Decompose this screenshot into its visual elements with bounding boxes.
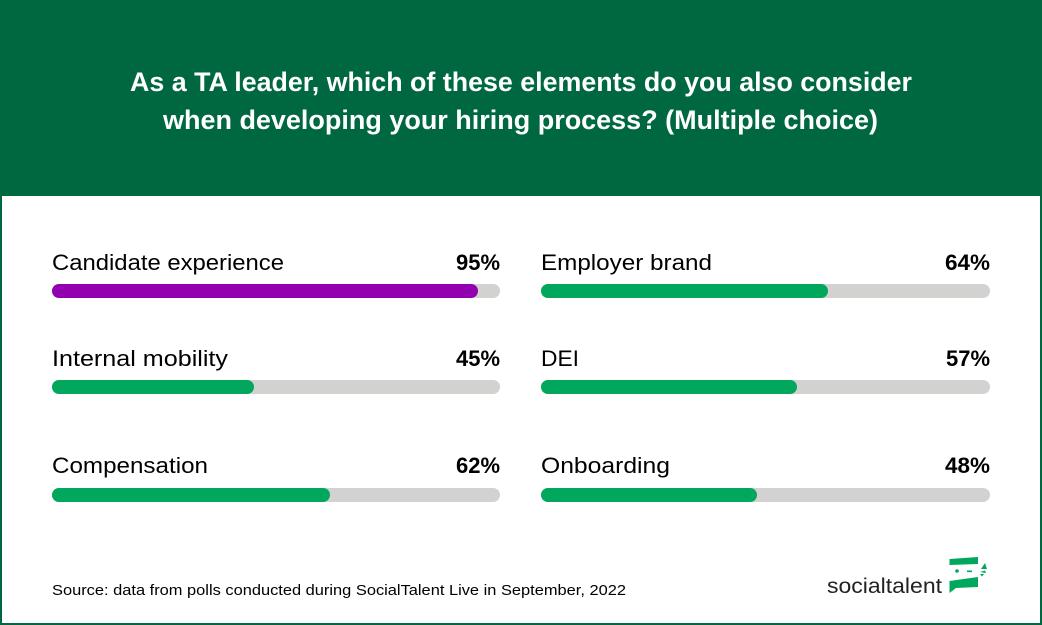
- bar: candidate experience 95%: [52, 250, 500, 298]
- logo: socialtalent: socialtalent: [827, 574, 942, 598]
- bar: DEI 57%: DEI: [541, 346, 579, 371]
- bar: candidate experience 95%: 95%: [456, 250, 500, 275]
- bar: compensation 62%: [52, 453, 500, 502]
- bar: internal mobility 45%: Internal mobility: [52, 346, 228, 371]
- bar: onboarding 48%: [541, 453, 990, 502]
- bar: DEI 57%: [541, 346, 990, 394]
- title: [130, 67, 912, 135]
- source note: Source: data from polls conducted during SocialTalent Live in September, 2022: [52, 582, 626, 599]
- logo: socialtalent: [827, 557, 987, 598]
- bar: employer brand 64%: Employer brand: [541, 250, 712, 275]
- title: As a TA leader, which of these elements do you also consider: [130, 67, 912, 97]
- bar: internal mobility 45%: 45%: [456, 346, 500, 371]
- bar: compensation 62%: Compensation: [52, 453, 208, 478]
- title: when developing your hiring process? (Multiple choice): [162, 105, 878, 135]
- bar: compensation 62%: 62%: [456, 453, 500, 478]
- bar: DEI 57%: 57%: [946, 346, 990, 371]
- bar: internal mobility 45%: [52, 346, 500, 394]
- icon: speech bubble: [950, 557, 987, 593]
- bar: onboarding 48%: Onboarding: [541, 453, 670, 478]
- bar: employer brand 64%: 64%: [945, 250, 990, 275]
- header banner: [0, 0, 1042, 196]
- bar: employer brand 64%: [541, 250, 990, 298]
- bar: onboarding 48%: 48%: [945, 453, 990, 478]
- bar: candidate experience 95%: Candidate experience: [52, 250, 284, 275]
